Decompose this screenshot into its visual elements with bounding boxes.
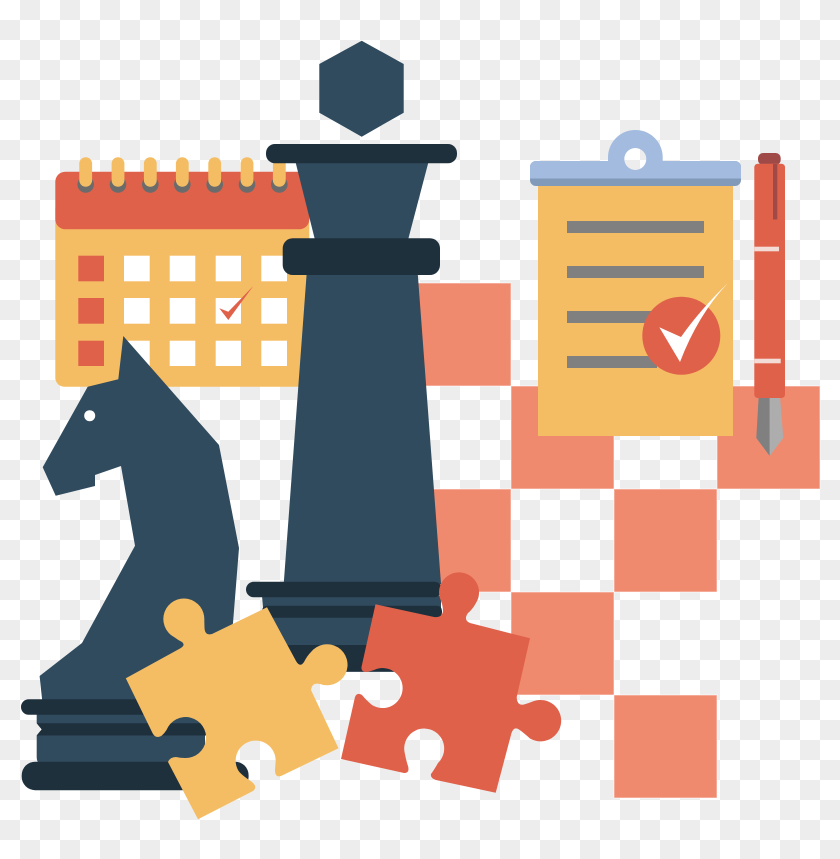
queen crown hexagon: [319, 41, 404, 137]
icon: yellow puzzle piece: [126, 599, 348, 819]
clipboard clip hole: [624, 148, 646, 170]
knight body: [37, 336, 239, 764]
clipboard text lines: [567, 221, 704, 368]
pen barrel: [754, 164, 785, 398]
icon: clipboard: [530, 130, 741, 436]
knight eye: [84, 410, 95, 421]
calendar header: [55, 172, 309, 229]
pen nib right side: [770, 396, 783, 456]
calendar check mark: [219, 286, 253, 320]
calendar binding rings: [77, 157, 288, 193]
icon: red puzzle piece: [341, 572, 561, 793]
pen cap button: [758, 153, 781, 165]
approval badge circle: [642, 297, 720, 375]
queen lower base: [262, 596, 441, 672]
pen clip: [773, 164, 777, 220]
icon: chess queen: [246, 41, 457, 672]
icon: calendar: [55, 157, 309, 387]
clipboard clip bar: [530, 161, 741, 186]
pen nib: [756, 396, 770, 456]
icon: fountain pen: [754, 153, 785, 456]
pen bands: [754, 247, 781, 363]
calendar body: [55, 200, 309, 387]
queen neck: [295, 160, 429, 240]
calendar day grid: [78, 256, 287, 366]
clipboard clip bar highlight: [530, 161, 741, 178]
panel: salmon chessboard squares: [400, 283, 820, 798]
clipboard paper: [538, 180, 733, 436]
queen body: [284, 273, 441, 584]
icon: chess knight: [21, 336, 249, 790]
approval check mark: [659, 283, 728, 362]
clipboard clip ring: [608, 130, 663, 165]
queen dark bands: [246, 144, 457, 672]
knight dark base bands: [21, 699, 249, 790]
